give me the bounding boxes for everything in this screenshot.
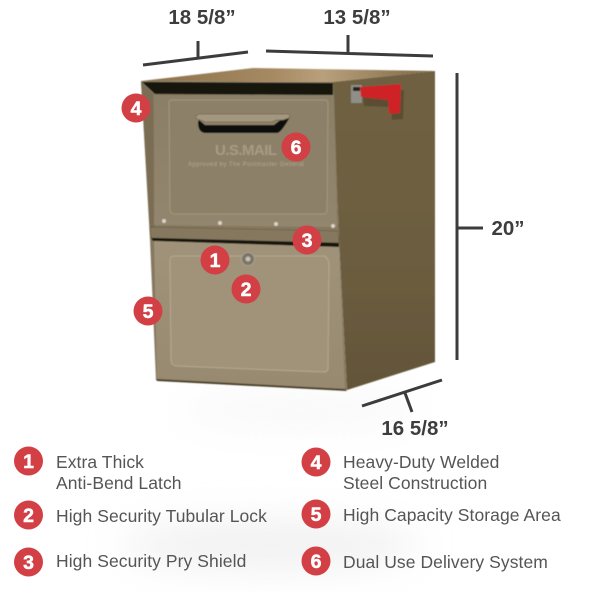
dimension: 13 5/8 — [266, 35, 433, 56]
callout 4: 4 — [131, 98, 142, 120]
mailbox illustration — [141, 68, 435, 391]
callout 6: 6 — [291, 137, 302, 159]
pry shield — [150, 227, 339, 243]
legend 5 — [302, 500, 561, 528]
legend 2: High Security Tubular Lock — [56, 506, 267, 526]
dimension: 20 — [457, 73, 483, 360]
rivets — [162, 219, 337, 385]
legend 4: Steel Construction — [343, 473, 487, 493]
lock — [242, 252, 254, 266]
legend 3 — [14, 548, 246, 576]
embossed lettering: U.S.MAIL — [215, 142, 277, 159]
upper door: Approved by The Postmaster General — [188, 162, 304, 168]
callout 4 — [122, 94, 150, 122]
legend 4: Heavy-Duty Welded — [343, 452, 500, 472]
label: 20: 20” — [491, 217, 525, 240]
legend 5: 5 — [311, 504, 322, 526]
mailbox front frame — [141, 81, 347, 390]
legend 2 — [14, 500, 267, 530]
mailbox right side — [333, 71, 435, 390]
callout 1 — [200, 246, 230, 274]
callout 1: 1 — [210, 250, 221, 272]
legend 3: 3 — [23, 552, 34, 574]
mailbox top — [141, 68, 435, 82]
label: 18 5/8: 18 5/8” — [168, 6, 236, 29]
lower door — [154, 241, 345, 389]
legend 6: 6 — [311, 551, 322, 573]
legend 2: 2 — [23, 505, 34, 527]
legend 6 — [302, 546, 548, 576]
dimension lines — [143, 35, 483, 412]
legend 1 — [14, 446, 182, 493]
dimension: 18 5/8 — [143, 41, 248, 65]
callout 5: 5 — [143, 301, 154, 323]
legend 1: Anti-Bend Latch — [56, 473, 182, 493]
legend 3: High Security Pry Shield — [56, 551, 246, 571]
legend 6: Dual Use Delivery System — [343, 552, 548, 572]
legend 1: 1 — [23, 451, 34, 473]
label: 13 5/8: 13 5/8” — [323, 6, 391, 29]
door handle — [196, 114, 290, 133]
legend 5: High Capacity Storage Area — [343, 505, 561, 525]
upper door — [154, 95, 337, 227]
dimension: 16 5/8 — [362, 380, 442, 412]
legend 4 — [302, 448, 500, 493]
callout 2 — [232, 274, 260, 304]
flag — [351, 84, 404, 120]
legend 1: Extra Thick — [56, 452, 144, 472]
callout 3: 3 — [302, 230, 313, 252]
floor shadow — [120, 394, 420, 571]
callout 2: 2 — [241, 279, 252, 301]
callout 3 — [292, 226, 322, 254]
callout 6 — [282, 132, 310, 162]
legend 4: 4 — [311, 452, 322, 474]
mail slot opening — [142, 82, 333, 95]
label: 16 5/8: 16 5/8” — [381, 417, 449, 440]
callout 5 — [134, 296, 162, 326]
